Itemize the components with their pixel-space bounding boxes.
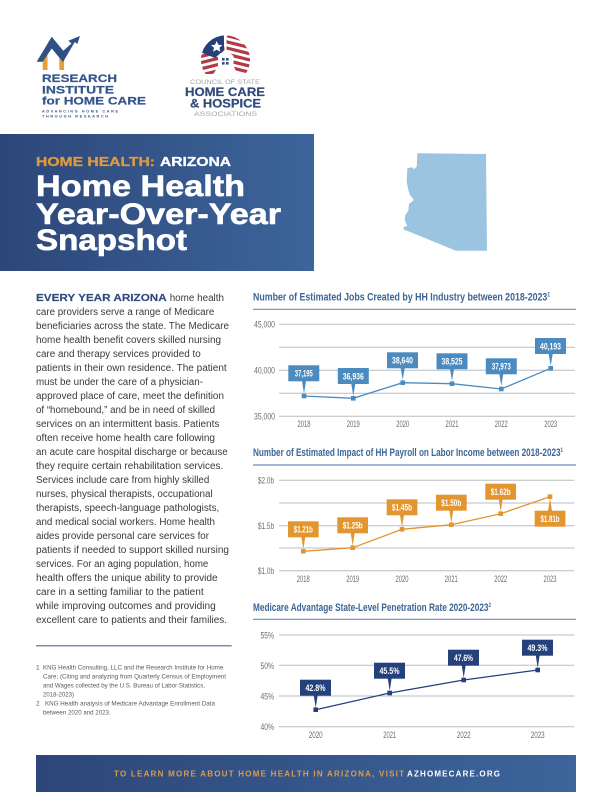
body text: aides provide personal care services for [36,531,210,542]
body text: often receive home health care following [36,433,215,444]
body text: health offers the unique ability to provide [36,573,218,584]
logo: Research Institute for Home Care: ADVANCING HOME CARE [42,110,118,114]
body text: Services include care from highly skilled [36,475,209,486]
chart: estimated jobs: 2019 [347,419,360,429]
chart title: 1 [561,448,563,454]
body text: while improving outcomes and providing [35,601,216,612]
callouts: 47.6% [454,653,473,664]
footer banner [36,755,576,792]
callouts: $1.21b [294,525,313,536]
logo: Council of State Home Care and Hospice Associations: ASSOCIATIONS [194,112,257,118]
footer banner: AZHOMECARE.ORG [407,770,500,778]
callouts: 38,640 [392,356,413,367]
chart: Medicare Advantage penetration rate [253,602,576,740]
chart: Medicare Advantage penetration rate: 50% [260,661,274,671]
callouts: 38,525 [442,357,463,368]
body text: they require certain rehabilitation services. [36,461,223,472]
callouts: $1.81b [540,514,560,525]
body text: must be under the care of a physician- [36,377,203,388]
chart: estimated jobs: 2022 [495,419,508,429]
body text: services on an intermittent basis. Patients [36,419,219,430]
callouts: 40,193 [540,341,561,352]
chart: Medicare Advantage penetration rate: 2021 [383,730,396,740]
body text: patients if needed to support skilled nursing [36,545,229,556]
chart: payroll impact on labor income: 2021 [445,574,458,584]
line series [313,668,540,712]
chart: Medicare Advantage penetration rate: 2023 [531,730,545,740]
icon: flag dome with house [201,36,250,74]
chart: payroll impact on labor income: 2022 [494,574,507,584]
chart: Medicare Advantage penetration rate: 40% [260,722,274,732]
logo: Research Institute for Home Care: THROUGH RESEARCH [42,114,108,118]
eyebrow: ARIZONA [160,154,232,169]
chart: Medicare Advantage penetration rate: 55% [260,630,274,640]
chart: payroll impact on labor income: 2018 [297,574,310,584]
footnotes: 2018-2023) [43,692,74,699]
callouts: 37,973 [492,362,511,373]
logo: Council of State Home Care and Hospice Associations: COUNCIL OF STATE [190,80,260,86]
chart: payroll impact on labor income: $1.0b [258,566,274,576]
callouts: $1.45b [392,503,412,514]
footnotes: 1 [36,665,40,672]
chart title: 2 [488,603,491,609]
icon: house with rising arrow [37,36,80,70]
eyebrow: HOME HEALTH: [36,154,155,169]
callouts: 49.3% [528,643,548,654]
footnotes: KNG Health Consulting, LLC and the Research Institute for Home [43,665,224,672]
body text: home health benefit covers skilled nursing [36,335,221,346]
logo: Council of State Home Care and Hospice Associations [185,34,265,118]
chart: payroll impact on labor income: 2020 [396,574,408,584]
title: Home Health [36,170,245,203]
icon: Arizona state map [403,153,487,251]
callouts: 37,195 [295,369,313,380]
body text: services. For an aging population, home [36,559,209,570]
callouts [288,484,565,549]
chart title: Medicare Advantage State-Level Penetration Rate 2020-2023 [253,602,567,614]
chart: estimated jobs: 45,000 [254,320,275,330]
body text: of “homebound,” and be in need of skilled [36,405,215,416]
body text: care providers serve a range of Medicare [36,307,215,318]
chart: estimated jobs: 2018 [298,419,310,429]
chart: estimated jobs: 2020 [396,419,409,429]
body text: home health [170,293,224,304]
chart: payroll impact on labor income: $1.5b [258,521,274,531]
callouts: $1.62b [491,487,511,498]
line series [301,494,552,554]
body text: nurses, physical therapists, occupational [36,489,213,500]
chart: Medicare Advantage penetration rate: 2022 [457,730,471,740]
chart: payroll impact on labor income: 2023 [544,574,556,584]
chart: payroll impact on labor income: 2019 [346,574,359,584]
chart title: 1 [547,292,551,298]
body text: an acute care hospital discharge or because [36,447,228,458]
chart: estimated jobs: 2023 [544,419,557,429]
chart: Medicare Advantage penetration rate: 2020 [309,730,323,740]
body text: and medical social workers. Home health [36,517,215,528]
body text: EVERY YEAR ARIZONA [36,292,167,304]
body text: patients in their own residence. The patient [36,363,227,374]
callouts: $1.50b [441,498,461,509]
callouts: 36,936 [343,371,364,382]
chart title: Number of Estimated Jobs Created by HH Industry between 2018-2023 [253,292,612,304]
logo: Research Institute for Home Care [37,36,146,118]
title: Snapshot [36,224,187,257]
callouts: 45.5% [380,666,400,677]
footer banner: TO LEARN MORE ABOUT HOME HEALTH IN ARIZONA, VISIT [114,770,404,778]
footnotes: KNG Health analysis of Medicare Advantage Enrollment Data [45,701,215,708]
footnotes: 2 [36,701,40,708]
chart: payroll impact on labor income: $2.0b [258,476,274,486]
callouts [288,338,566,396]
body text: approved place of care, meet the definition [36,391,224,402]
header banner [0,134,314,271]
logo: Research Institute for Home Care: RESEARCH [42,73,117,85]
title [36,170,281,257]
logo: Council of State Home Care and Hospice Associations: HOME CARE [185,87,265,99]
eyebrow [36,154,232,169]
chart: payroll impact on labor income [253,447,576,584]
logo: Research Institute for Home Care: for HOME CARE [42,95,146,107]
callouts: 42.8% [306,683,326,694]
body text: care and therapy services provided to [36,349,201,360]
chart: estimated jobs: 2021 [446,419,458,429]
body text: excellent care to patients and their families. [36,615,227,626]
title: Year-Over-Year [36,198,281,231]
callouts: $1.25b [343,521,363,532]
logo: Research Institute for Home Care: INSTITUTE [42,84,114,96]
body text: therapists, speech-language pathologists, [36,503,219,514]
footnotes: and Wages collected by the U.S. Bureau of Labor Statistics, [43,683,205,690]
body text: beneficiaries across the state. The Medicare [36,321,229,332]
footnotes: Care; (Citing and analyzing from Quarterly Census of Employment [43,674,226,681]
body text [35,292,229,626]
footnotes: between 2020 and 2023. [43,710,111,717]
chart: estimated jobs: 35,000 [254,412,275,422]
chart: Medicare Advantage penetration rate: 45% [260,692,274,702]
callouts [300,640,553,708]
line series [302,366,553,401]
chart: estimated jobs: 40,000 [254,366,275,376]
body text: care in a setting familiar to the patient [36,587,204,598]
footnotes [36,665,226,717]
chart: estimated jobs [253,292,576,429]
logo: Council of State Home Care and Hospice Associations: & HOSPICE [190,99,261,111]
